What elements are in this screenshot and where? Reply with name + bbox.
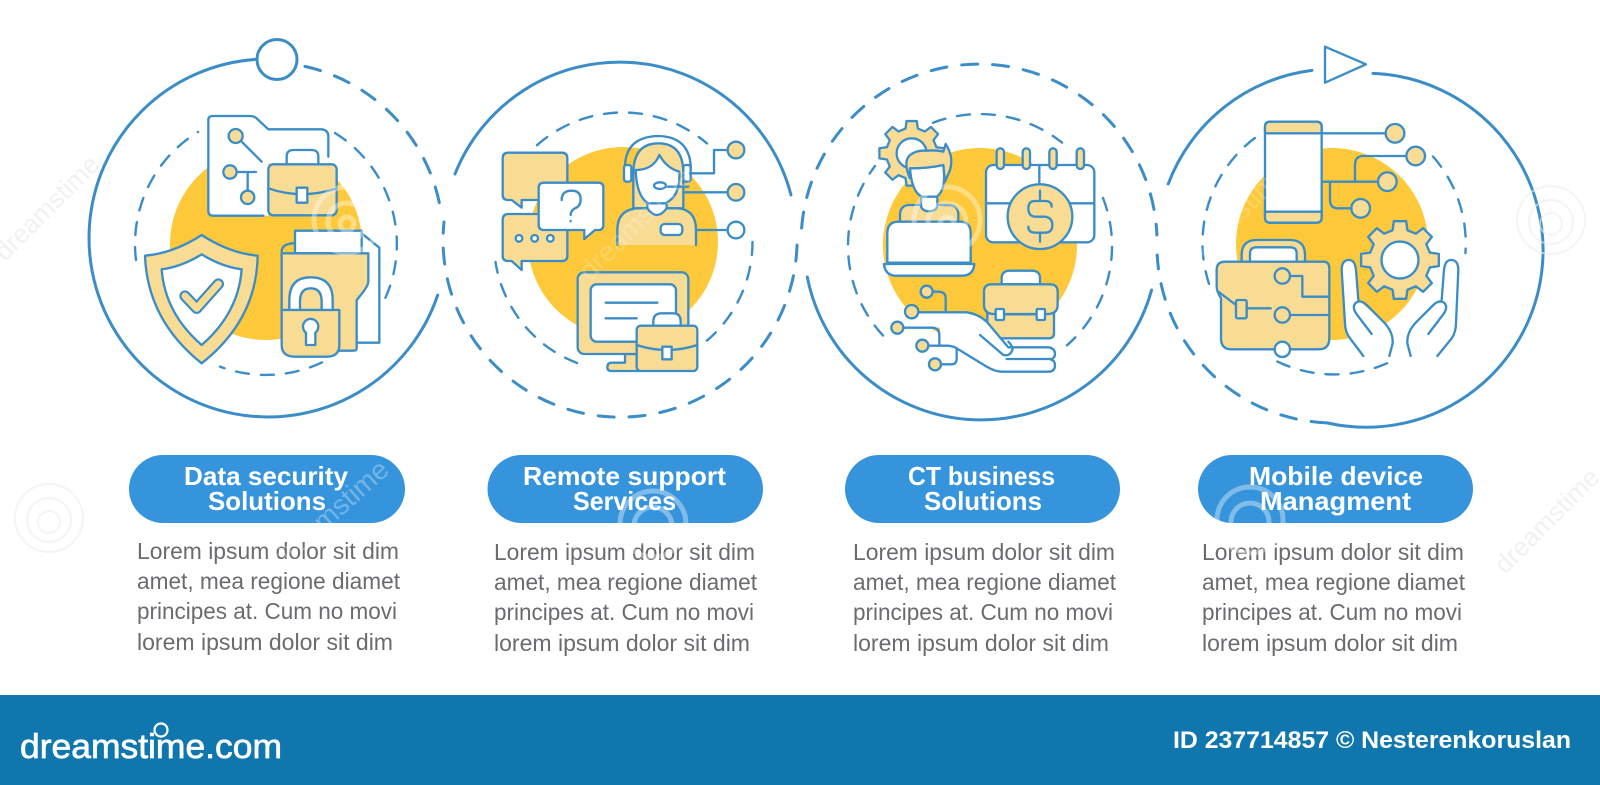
icon: remote support set [503, 136, 744, 371]
body text: principes at. Cum no movi [137, 598, 397, 624]
outer ring dashed [1157, 255, 1327, 423]
title pill: Managment [1260, 486, 1411, 516]
icon: mobile device set [1217, 47, 1458, 357]
body text: lorem ipsum dolor sit dim [494, 630, 750, 656]
icon: business solutions set [879, 121, 1094, 372]
title pill [1198, 455, 1473, 523]
title pill: Mobile device [1249, 461, 1423, 491]
body text: lorem ipsum dolor sit dim [1202, 630, 1458, 656]
body text: principes at. Cum no movi [494, 599, 754, 625]
body text: amet, mea regione diamet [1202, 569, 1465, 595]
outer ring solid [455, 62, 791, 195]
outer ring solid [1168, 70, 1543, 427]
body text: Lorem ipsum dolor sit dim [494, 539, 755, 565]
title pill: Solutions [924, 486, 1042, 516]
title pill: Remote support [523, 461, 726, 491]
inner dashed ring [135, 132, 397, 375]
yellow disc [883, 148, 1077, 342]
outer ring solid [89, 59, 438, 417]
title pill: Data security [184, 461, 349, 491]
outer ring dashed [443, 222, 797, 417]
body text [853, 539, 1116, 656]
body text [137, 538, 400, 655]
inner dashed ring [1203, 136, 1466, 374]
title pill: CT business [908, 461, 1055, 491]
body text: Lorem ipsum dolor sit dim [853, 539, 1115, 565]
watermark overlay: dreamstime [265, 454, 395, 574]
icon: data security set [145, 116, 379, 363]
start marker circle [257, 40, 297, 80]
body text: lorem ipsum dolor sit dim [853, 630, 1109, 656]
end marker triangle [1325, 47, 1366, 83]
watermark overlay [0, 149, 1600, 579]
body text: principes at. Cum no movi [1202, 599, 1462, 625]
title pill [129, 455, 405, 523]
image credit: ID 237714857 © Nesterenkoruslan [1173, 727, 1571, 754]
title pill: Solutions [208, 486, 326, 516]
footer logo: dreamstime.com [20, 728, 282, 766]
outer ring solid [807, 277, 1152, 420]
panel: mobile device management [1157, 47, 1543, 656]
yellow disc [1236, 148, 1428, 340]
body text: amet, mea regione diamet [853, 569, 1116, 595]
body text [1202, 539, 1465, 656]
body text [494, 539, 757, 656]
outer ring dashed [305, 66, 441, 212]
panel: data security [89, 40, 441, 655]
title pill [488, 455, 763, 523]
panel: business solutions [802, 64, 1157, 656]
inner dashed ring [848, 114, 1112, 345]
footer bar [0, 695, 1600, 785]
body text: lorem ipsum dolor sit dim [137, 629, 393, 655]
inner dashed ring [496, 112, 752, 363]
title pill [845, 455, 1120, 523]
body text: principes at. Cum no movi [853, 599, 1113, 625]
outer ring dashed [802, 64, 1157, 235]
yellow disc [528, 147, 718, 337]
body text: Lorem ipsum dolor sit dim [1202, 539, 1464, 565]
watermark overlay: dreamstime [1169, 156, 1295, 281]
body text: amet, mea regione diamet [494, 569, 757, 595]
watermark overlay: dreamstime [572, 161, 698, 286]
body text: Lorem ipsum dolor sit dim [137, 538, 399, 564]
yellow disc [170, 148, 362, 340]
body text: amet, mea regione diamet [137, 568, 400, 594]
title pill: Services [573, 486, 676, 516]
panel: remote support [443, 62, 797, 656]
